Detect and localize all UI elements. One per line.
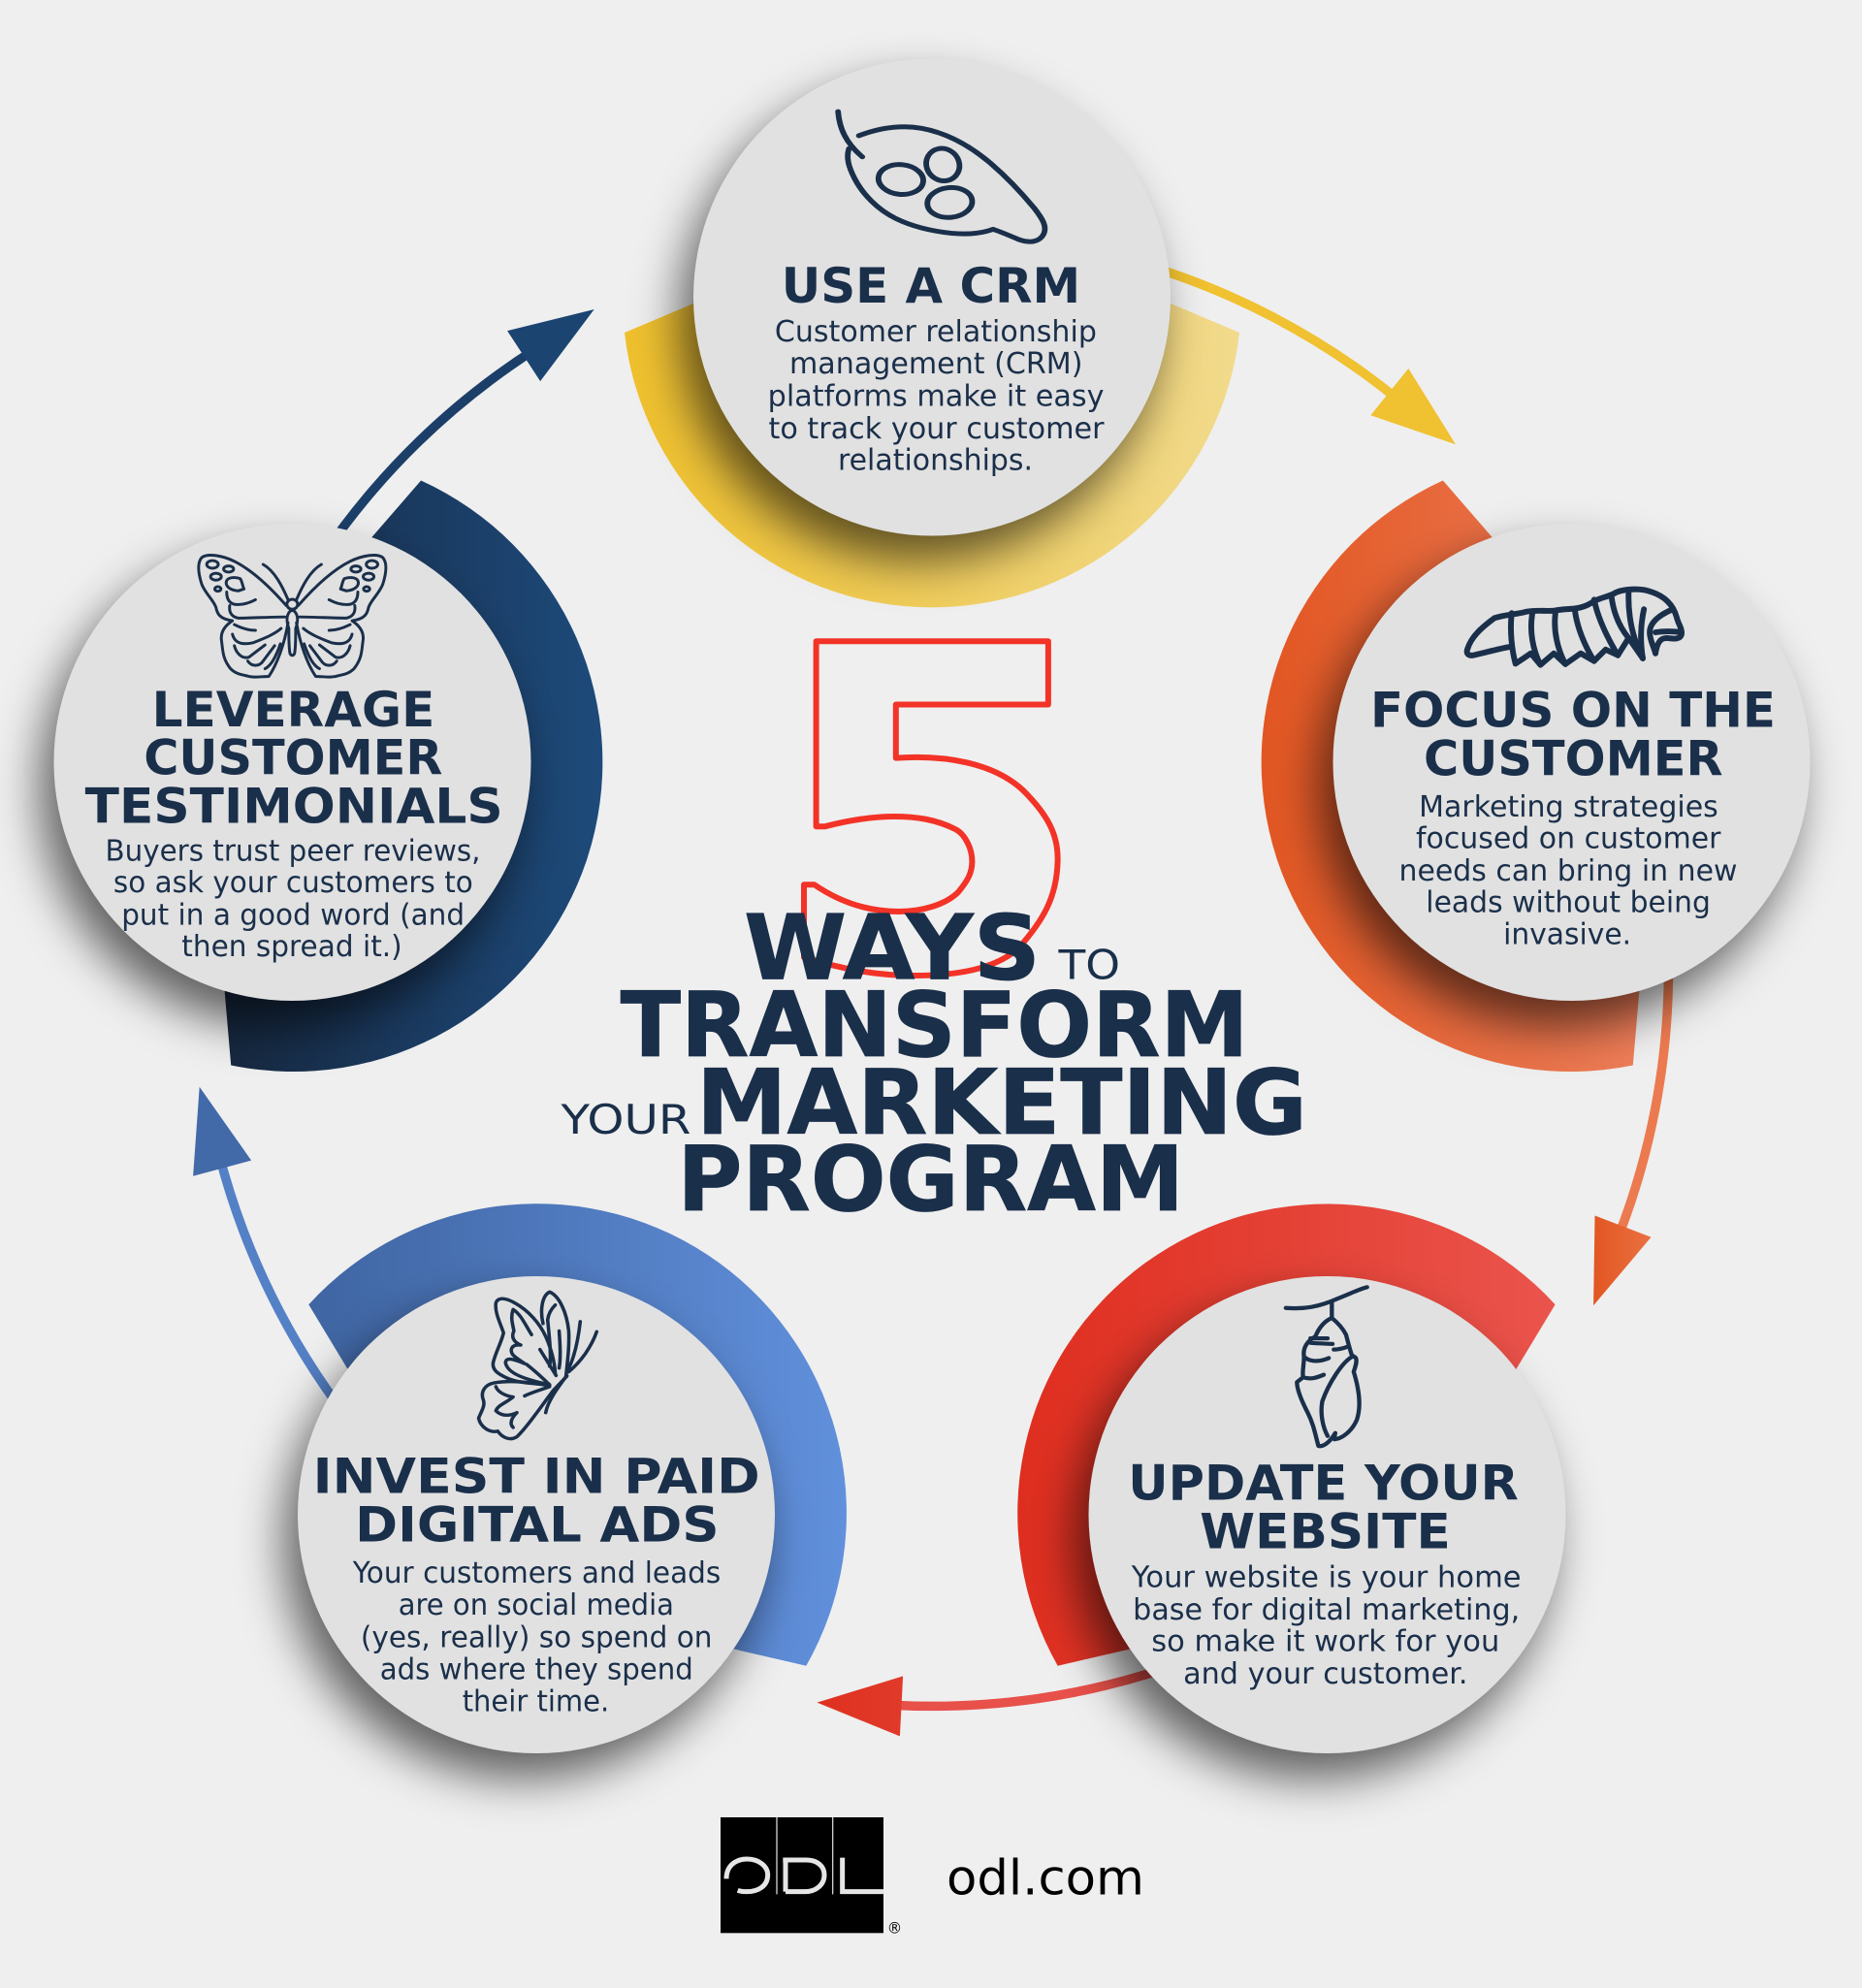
heading: TESTIMONIALS — [85, 778, 503, 834]
title: WAYS — [744, 895, 1041, 1000]
heading: UPDATE YOUR — [1128, 1456, 1519, 1512]
text block — [1398, 790, 1738, 952]
text block — [768, 315, 1105, 477]
text block — [105, 834, 481, 964]
text block: Your customers and leads — [352, 1556, 721, 1590]
title: PROGRAM — [677, 1127, 1184, 1232]
text block: relationships. — [838, 443, 1033, 477]
panel: leverage customer testimonials — [54, 524, 531, 1001]
text block: are on social media — [399, 1588, 674, 1622]
heading: WEBSITE — [1200, 1503, 1451, 1559]
arrow: update your website to invest in paid digital ads — [817, 1662, 1184, 1736]
text block: (yes, really) so spend on — [361, 1621, 712, 1654]
panel: update your website — [1088, 1276, 1565, 1753]
panel: focus on the customer — [1332, 524, 1810, 1001]
text block: Your website is your home — [1131, 1561, 1522, 1594]
title — [560, 895, 1307, 1232]
arrow: leverage customer testimonials to use a CRM — [321, 309, 594, 558]
arrow: invest in paid digital ads to leverage customer testimonials — [193, 1087, 352, 1424]
text block — [352, 1556, 721, 1719]
heading: INVEST IN PAID — [313, 1449, 760, 1505]
text block: then spread it.) — [181, 930, 402, 964]
heading: CUSTOMER — [144, 730, 442, 786]
heading — [1128, 1456, 1519, 1559]
title: TRANSFORM — [621, 973, 1249, 1077]
title: MARKETING — [696, 1050, 1307, 1155]
text block: leads without being — [1426, 886, 1711, 920]
text block: management (CRM) — [789, 347, 1082, 381]
panel: invest in paid digital ads — [298, 1276, 775, 1753]
icon: chrysalis — [1286, 1287, 1367, 1446]
text block: and your customer. — [1183, 1657, 1468, 1691]
text block: invasive. — [1503, 917, 1631, 952]
text block: to track your customer — [768, 412, 1105, 446]
heading: USE A CRM — [782, 258, 1080, 314]
title: YOUR — [560, 1096, 690, 1143]
heading — [313, 1449, 760, 1554]
ring: red — [1017, 1204, 1556, 1666]
logo: ODL: ® — [887, 1919, 902, 1938]
icon: leaf with eggs — [838, 112, 1044, 241]
title: TO — [1057, 941, 1120, 988]
ring: yellow — [625, 203, 1239, 607]
ring: navy — [203, 481, 602, 1072]
arrow: focus on the customer to update your website — [1593, 945, 1668, 1305]
text block: so ask your customers to — [113, 866, 473, 900]
panel: use a CRM — [693, 58, 1171, 535]
text block: put in a good word (and — [121, 898, 465, 932]
text block: their time. — [463, 1685, 609, 1719]
ring: blue — [308, 1203, 847, 1666]
text block: platforms make it easy — [768, 380, 1104, 413]
text block: Marketing strategies — [1419, 790, 1718, 824]
icon: side butterfly — [479, 1292, 596, 1439]
heading: FOCUS ON THE — [1370, 683, 1776, 739]
text block: needs can bring in new — [1398, 854, 1738, 888]
icon: outlined number 5 — [804, 641, 1058, 976]
heading — [85, 682, 503, 834]
website: odl.com — [947, 1849, 1144, 1906]
icon: caterpillar — [1467, 590, 1682, 665]
text block: focused on customer — [1416, 822, 1721, 856]
icon: monarch butterfly — [199, 555, 386, 677]
text block: Buyers trust peer reviews, — [105, 834, 481, 868]
text block: so make it work for you — [1151, 1625, 1499, 1659]
heading: LEVERAGE — [152, 682, 434, 738]
text block — [1131, 1561, 1522, 1691]
text block: base for digital marketing, — [1133, 1593, 1520, 1627]
heading — [1370, 683, 1776, 787]
arrow: use a CRM to focus on the customer — [1135, 262, 1456, 444]
text block: ads where they spend — [380, 1652, 693, 1686]
ring: orange — [1262, 481, 1661, 1072]
heading: CUSTOMER — [1424, 731, 1722, 787]
text block: Customer relationship — [775, 315, 1097, 349]
heading: DIGITAL ADS — [355, 1497, 720, 1554]
logo: ODL — [721, 1817, 902, 1938]
